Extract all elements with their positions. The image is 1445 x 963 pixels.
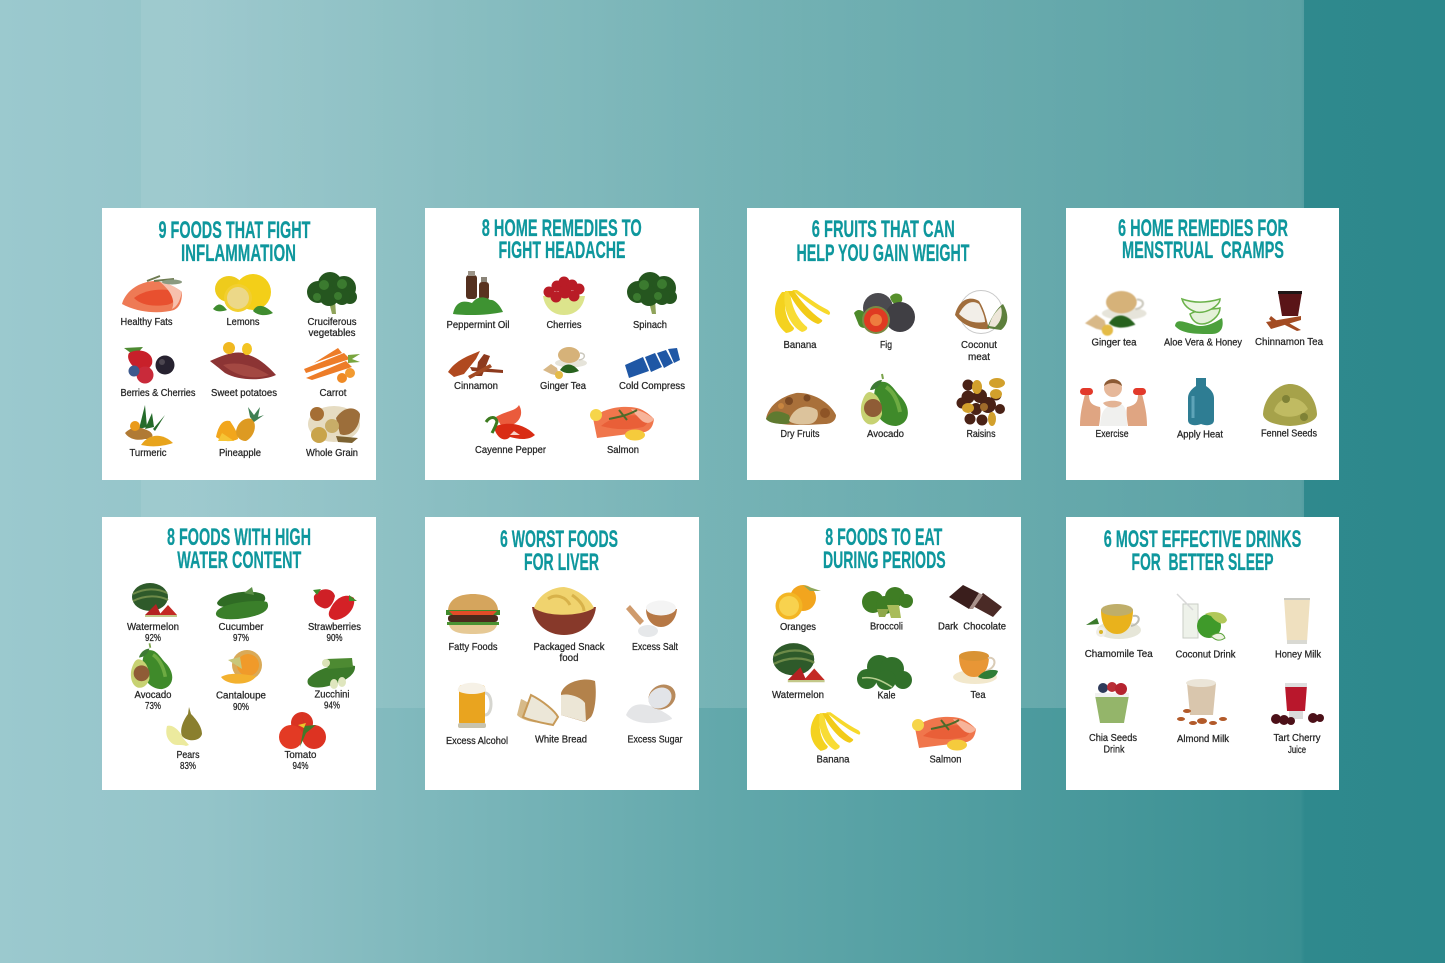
panel: 6 worst foods for liver	[425, 517, 699, 790]
item: exercise	[1080, 379, 1147, 440]
item: spinach	[627, 272, 677, 331]
item: ginger tea	[1085, 291, 1147, 348]
item: white bread: White Bread	[535, 734, 587, 746]
title	[796, 216, 970, 267]
item: white bread	[517, 680, 596, 746]
item: coconut meat	[955, 290, 1007, 363]
item: tea	[953, 651, 998, 701]
item: banana	[811, 712, 860, 766]
item: banana: Banana	[784, 340, 817, 351]
item: tomato: 94%	[292, 761, 309, 772]
title: 6 HOME REMEDIES FOR	[1118, 215, 1288, 242]
item: spinach: Spinach	[633, 320, 667, 331]
item: coconut drink	[1176, 594, 1236, 660]
item: watermelon	[127, 583, 179, 644]
item: fatty foods: Fatty Foods	[448, 642, 498, 653]
item: peppermint oil: Peppermint Oil	[446, 320, 510, 331]
item: excess salt: Excess Salt	[632, 642, 678, 653]
item: cayenne pepper	[475, 405, 547, 456]
item: excess alcohol	[446, 683, 508, 747]
item: watermelon	[772, 643, 825, 701]
item: banana	[775, 290, 830, 351]
title: 6 MOST EFFECTIVE DRINKS	[1104, 526, 1301, 553]
item: chamomile tea: Chamomile Tea	[1085, 649, 1153, 660]
item: fig	[854, 293, 915, 351]
item: cherries: Cherries	[546, 320, 582, 331]
item: cold compress: Cold Compress	[619, 381, 685, 392]
item: aloe vera and honey	[1164, 299, 1242, 348]
item: pears: Pears	[176, 750, 200, 761]
item: aloe vera and honey: Aloe Vera & Honey	[1164, 338, 1242, 348]
item: carrot: Carrot	[320, 388, 347, 399]
item: sweet potatoes	[210, 342, 277, 399]
item: almond milk	[1177, 679, 1229, 745]
item: cruciferous vegetables: Cruciferous	[308, 317, 357, 328]
item: cantaloupe	[216, 650, 267, 713]
item: dark chocolate	[938, 585, 1007, 632]
item: chia seeds drink	[1089, 682, 1137, 756]
item: avocado	[131, 643, 172, 712]
item: coconut drink: Coconut Drink	[1176, 650, 1236, 660]
title: 9 FOODS THAT FIGHT	[158, 217, 311, 244]
item: cucumber: Cucumber	[218, 622, 264, 633]
item: berries and cherries: Berries & Cherries	[120, 388, 196, 399]
title	[500, 526, 618, 576]
item: pineapple: Pineapple	[219, 448, 262, 459]
item: cantaloupe: Cantaloupe	[216, 690, 267, 702]
item: cucumber: 97%	[233, 633, 249, 644]
item: ginger tea	[540, 347, 587, 392]
item: avocado: 73%	[145, 701, 161, 712]
item: avocado: Avocado	[867, 429, 905, 440]
item: ginger tea: Ginger Tea	[540, 381, 587, 392]
item: chinnamon tea: Chinnamon Tea	[1255, 337, 1324, 348]
item: salmon	[590, 407, 654, 456]
item: cinnamon: Cinnamon	[454, 381, 498, 392]
item: apply heat	[1177, 378, 1223, 440]
item: packaged snack food: Packaged Snack	[534, 642, 605, 653]
item: whole grain: Whole Grain	[306, 448, 358, 459]
item: oranges	[776, 585, 821, 633]
item: apply heat: Apply Heat	[1177, 430, 1223, 440]
item: strawberries	[308, 589, 361, 644]
title: 6 WORST FOODS	[500, 526, 618, 553]
item: zucchini: 94%	[324, 700, 340, 712]
title: 8 FOODS WITH HIGH	[167, 524, 311, 551]
item: excess sugar: Excess Sugar	[628, 734, 683, 746]
item: excess alcohol: Excess Alcohol	[446, 736, 508, 747]
item: cucumber	[216, 587, 268, 644]
item: cherries	[543, 276, 585, 331]
item: chia seeds drink: Chia Seeds	[1089, 733, 1137, 744]
item: banana: Banana	[816, 754, 850, 766]
title: DURING PERIODS	[823, 547, 946, 574]
item: avocado	[861, 374, 908, 440]
item: tomato	[279, 712, 326, 772]
item: pears	[166, 707, 202, 772]
item: almond milk: Almond Milk	[1177, 734, 1229, 745]
item: strawberries: 90%	[326, 633, 343, 644]
item: broccoli: Broccoli	[870, 622, 903, 632]
title	[482, 215, 642, 264]
item: packaged snack food	[532, 587, 605, 664]
item: kale: Kale	[878, 690, 896, 702]
title	[1118, 215, 1288, 264]
item: fennel seeds: Fennel Seeds	[1261, 428, 1317, 440]
item: salmon: Salmon	[930, 754, 962, 766]
item: whole grain	[306, 406, 360, 459]
panel: 6 fruits that can help you gain weight	[747, 208, 1021, 480]
item: berries and cherries	[120, 347, 196, 399]
item: cantaloupe: 90%	[233, 702, 249, 713]
item: dark chocolate: Dark Chocolate	[938, 622, 1007, 632]
item: salmon	[912, 717, 976, 766]
item: watermelon: Watermelon	[127, 622, 179, 633]
item: cayenne pepper: Cayenne Pepper	[475, 445, 547, 456]
item: sweet potatoes: Sweet potatoes	[211, 388, 277, 399]
item: tart cherry juice: Juice	[1288, 745, 1306, 756]
item: lemons: Lemons	[226, 317, 260, 328]
title	[823, 524, 946, 574]
item: chinnamon tea	[1255, 291, 1324, 348]
panel: 6 most effective drinks for better sleep	[1066, 517, 1339, 790]
item: strawberries: Strawberries	[308, 622, 361, 633]
item: salmon: Salmon	[607, 445, 639, 456]
item: chia seeds drink: Drink	[1104, 744, 1125, 756]
title	[1104, 526, 1301, 576]
panel: 6 home remedies for menstrual cramps	[1066, 208, 1339, 480]
title	[167, 524, 311, 574]
item: chamomile tea	[1085, 604, 1153, 660]
item: oranges: Oranges	[780, 622, 816, 633]
panel: 8 foods to eat during periods	[747, 517, 1021, 790]
item: pears: 83%	[180, 761, 196, 772]
panel: 8 foods with high water content	[102, 517, 376, 790]
title: FOR LIVER	[524, 549, 599, 576]
item: broccoli	[862, 587, 913, 632]
item: tart cherry juice: Tart Cherry	[1274, 733, 1321, 744]
item: healthy fats	[120, 276, 182, 328]
item: fig: Fig	[880, 340, 892, 351]
item: tea: Tea	[970, 690, 986, 701]
item: zucchini: Zucchini	[314, 690, 350, 700]
item: cruciferous vegetables	[307, 272, 357, 339]
title: FOR BETTER SLEEP	[1132, 549, 1274, 576]
item: pineapple	[216, 407, 264, 459]
item: cold compress	[619, 348, 685, 392]
item: ginger tea: Ginger tea	[1092, 338, 1137, 348]
item: raisins: Raisins	[966, 429, 996, 440]
item: honey milk: Honey Milk	[1275, 650, 1321, 660]
item: peppermint oil	[446, 271, 510, 331]
title: MENSTRUAL CRAMPS	[1122, 237, 1284, 264]
panel: 9 foods that fight inflammation	[102, 208, 376, 480]
item: tomato: Tomato	[284, 750, 317, 761]
item: fennel seeds	[1261, 384, 1317, 440]
title: 8 FOODS TO EAT	[825, 524, 942, 551]
item: coconut meat: meat	[968, 352, 990, 363]
title: INFLAMMATION	[181, 240, 296, 267]
title: HELP YOU GAIN WEIGHT	[796, 240, 970, 267]
title: WATER CONTENT	[177, 547, 301, 574]
item: cinnamon	[448, 351, 503, 392]
item: avocado: Avocado	[134, 690, 172, 701]
item: cruciferous vegetables: vegetables	[308, 328, 356, 339]
item: turmeric	[125, 405, 173, 459]
item: turmeric: Turmeric	[130, 448, 167, 459]
panel: 8 home remedies to fight headache	[425, 208, 699, 480]
item: zucchini	[308, 658, 355, 712]
item: excess sugar	[626, 680, 683, 746]
title: 6 FRUITS THAT CAN	[812, 216, 955, 243]
item: dry fruits	[766, 393, 836, 440]
item: tart cherry juice	[1271, 683, 1324, 756]
item: watermelon: 92%	[145, 633, 161, 644]
item: packaged snack food: food	[560, 653, 578, 664]
item: healthy fats: Healthy Fats	[120, 317, 173, 328]
item: carrot	[304, 348, 360, 399]
item: kale	[857, 655, 912, 702]
item: fatty foods	[446, 594, 500, 653]
item: raisins	[956, 378, 1005, 440]
title	[158, 217, 311, 267]
item: dry fruits: Dry Fruits	[780, 429, 820, 440]
item: watermelon: Watermelon	[772, 690, 824, 701]
item: excess salt	[626, 600, 678, 653]
title: 8 HOME REMEDIES TO	[482, 215, 642, 242]
item: lemons	[213, 274, 273, 328]
item: coconut meat: Coconut	[961, 340, 997, 351]
title: FIGHT HEADACHE	[498, 237, 626, 264]
item: honey milk	[1275, 598, 1321, 660]
item: exercise: Exercise	[1096, 429, 1129, 440]
